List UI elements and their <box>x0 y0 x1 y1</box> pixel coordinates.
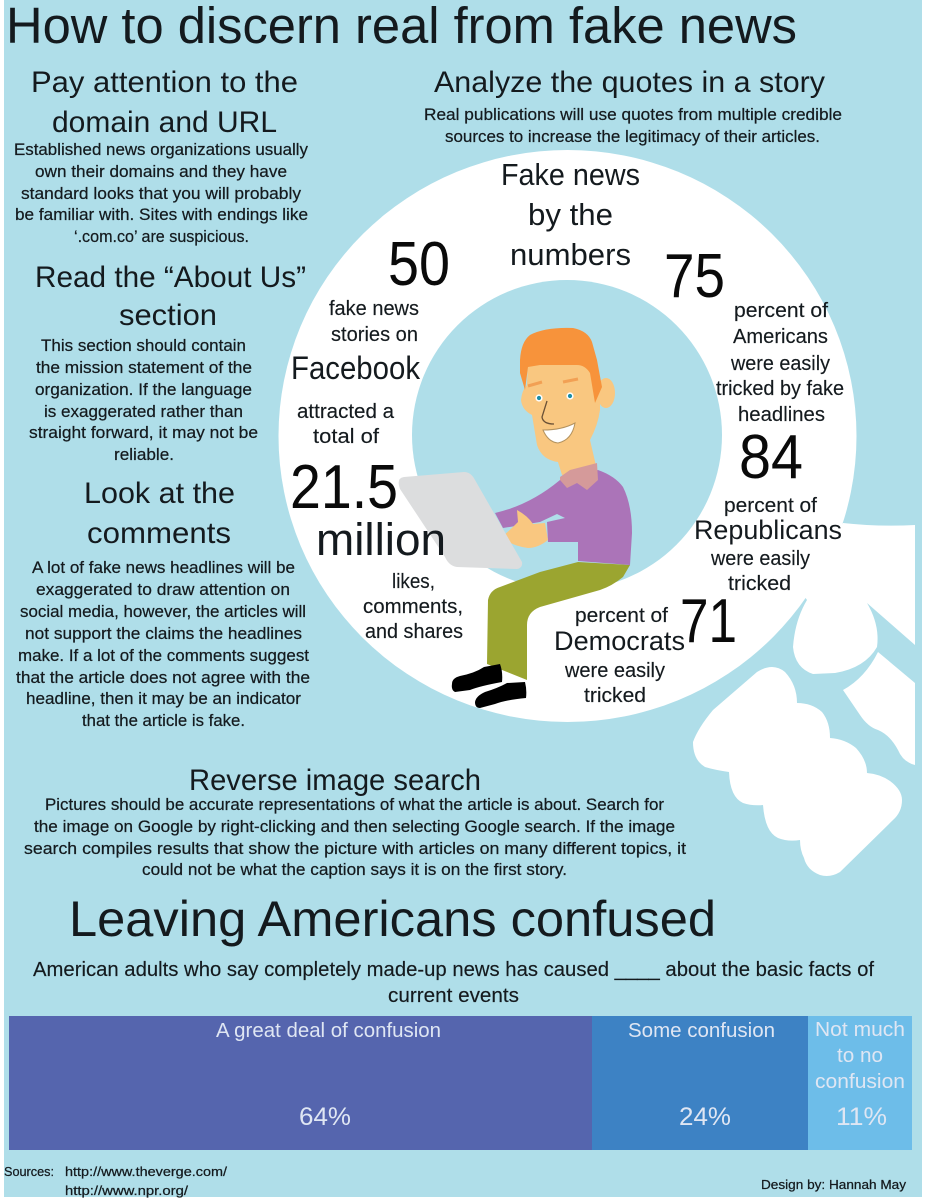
section: quotes: sources to increase the legitimacy of their articles. <box>445 128 820 146</box>
section: comments: headline, then it may be an indicator <box>26 690 302 708</box>
section: reverse image search: the image on Google by right-clicking and then selecting Google search. If the image <box>34 818 675 836</box>
chart subtitle: American adults who say completely made-up news has caused ____ about the basic facts of <box>33 959 874 981</box>
stat: 71 percent of Democrats: tricked <box>584 684 646 707</box>
ring heading: by the <box>528 197 613 232</box>
segment: a great deal of confusion <box>9 1016 592 1150</box>
section: about us: section <box>119 299 217 332</box>
section: about us: Read the “About Us” <box>35 261 306 294</box>
segment: not much to no confusion: confusion <box>815 1071 905 1093</box>
eyes <box>535 394 543 402</box>
stat: 71 percent of Democrats: 71 <box>680 587 737 656</box>
hand <box>502 510 548 548</box>
stat: 71 percent of Democrats: percent of <box>575 604 668 627</box>
segment: some confusion: 24% <box>679 1103 731 1131</box>
section: about us <box>29 261 306 464</box>
segment: some confusion: Some confusion <box>628 1020 775 1042</box>
stat: Facebook fake news: likes, <box>392 570 435 593</box>
stat: 75 percent of Americans: headlines <box>738 403 825 426</box>
section: domain and URL <box>14 66 309 246</box>
illustration: man reading a tablet <box>399 328 632 708</box>
stat: Facebook fake news: stories on <box>331 323 418 346</box>
stat: 75 percent of Americans <box>664 242 844 426</box>
stat: 75 percent of Americans: were easily <box>730 352 831 375</box>
section: reverse image search <box>24 764 686 879</box>
section: about us: This section should contain <box>41 337 246 355</box>
stat: 84 percent of Republicans: tricked <box>728 572 791 595</box>
ring: fake news by the numbers <box>278 150 856 722</box>
stat: Facebook fake news: and shares <box>365 620 463 643</box>
section: domain and URL: be familiar with. Sites with endings like <box>15 206 308 224</box>
section: domain and URL: domain and URL <box>52 106 277 139</box>
section: about us: straight forward, it may not be <box>29 424 258 442</box>
section: comments: exaggerated to draw attention on <box>36 581 290 599</box>
eyebrows <box>528 379 578 386</box>
section: reverse image search: could not be what the caption says it is on the first story. <box>142 861 567 879</box>
stat: Facebook fake news: total of <box>313 425 379 448</box>
sweater <box>495 470 632 565</box>
stat: Facebook fake news <box>290 230 463 643</box>
section: comments: comments <box>87 517 231 550</box>
sources: Sources: <box>4 1164 54 1179</box>
section: domain and URL: ‘.com.co’ are suspicious. <box>74 228 249 246</box>
stat: 84 percent of Republicans: were easily <box>710 547 811 570</box>
stat: Facebook fake news: attracted a <box>297 400 395 423</box>
segment: a great deal of confusion: 64% <box>299 1103 351 1131</box>
stat: 84 percent of Republicans: percent of <box>724 494 817 517</box>
segment: not much to no confusion: to no <box>837 1045 883 1067</box>
icon: thumbs up hand <box>693 523 915 876</box>
ring heading: numbers <box>510 237 631 272</box>
section: comments <box>16 477 310 730</box>
stat: 71 percent of Democrats: Democrats <box>554 626 685 656</box>
shoes <box>452 664 526 708</box>
section: domain and URL: Pay attention to the <box>31 66 298 99</box>
ear <box>597 378 615 408</box>
stat: 75 percent of Americans: tricked by fake <box>716 377 844 400</box>
segment: not much to no confusion: Not much <box>815 1019 905 1041</box>
stat: 84 percent of Republicans <box>694 423 842 595</box>
stat: 75 percent of Americans: percent of <box>734 299 828 322</box>
legs <box>487 562 630 680</box>
section: comments: that the article does not agree with the <box>16 669 310 687</box>
section: comments: make. If a lot of the comments suggest <box>18 647 309 665</box>
section: reverse image search: Pictures should be accurate representations of what the article is about. Search for <box>45 796 665 814</box>
section: comments: A lot of fake news headlines will be <box>32 559 295 577</box>
stat: Facebook fake news: comments, <box>363 595 463 618</box>
heading: leaving Americans confused: Leaving Americans confused <box>69 891 716 947</box>
sources: http://www.npr.org/ <box>65 1183 188 1198</box>
section: domain and URL: standard looks that you will probably <box>21 185 302 203</box>
section: quotes: Real publications will use quotes from multiple credible <box>424 106 842 124</box>
section: quotes <box>424 66 842 146</box>
credit: Design by: Hannah May <box>761 1177 907 1192</box>
nose <box>542 401 554 424</box>
stat: Facebook fake news: 50 <box>388 230 450 299</box>
section: about us: is exaggerated rather than <box>44 403 243 421</box>
section: quotes: Analyze the quotes in a story <box>434 66 825 99</box>
stat: 75 percent of Americans: 75 <box>664 242 725 311</box>
sources <box>4 1164 227 1198</box>
chart subtitle <box>33 959 874 1007</box>
stat: Facebook fake news: 21.5 <box>290 453 398 522</box>
section: domain and URL: Established news organizations usually <box>14 141 309 159</box>
ring heading: Fake news <box>501 157 640 192</box>
chart subtitle: current events <box>388 985 519 1007</box>
segment: not much to no confusion <box>808 1016 912 1150</box>
section: about us: reliable. <box>114 446 174 464</box>
ring heading <box>501 157 640 272</box>
stat: Facebook fake news: Facebook <box>291 350 421 386</box>
section: about us: organization. If the language <box>35 381 252 399</box>
section: comments: Look at the <box>84 477 235 510</box>
section: about us: the mission statement of the <box>36 359 252 377</box>
collar <box>560 463 598 490</box>
segment: some confusion <box>592 1016 808 1150</box>
section: comments: not support the claims the headlines <box>25 625 302 643</box>
section: reverse image search: search compiles results that show the picture with articles on many different topics, it <box>24 840 686 858</box>
stat: 71 percent of Democrats <box>554 587 737 707</box>
tablet <box>399 472 522 569</box>
neck and face <box>521 360 600 475</box>
stat: Facebook fake news: million <box>316 514 446 565</box>
stat: Facebook fake news: fake news <box>329 297 419 320</box>
stat: 71 percent of Democrats: were easily <box>564 659 666 682</box>
section: reverse image search: Reverse image search <box>189 764 481 797</box>
stat: 84 percent of Republicans: 84 <box>739 423 803 492</box>
smile <box>543 423 575 443</box>
segment: a great deal of confusion: A great deal of confusion <box>216 1020 441 1042</box>
segment: not much to no confusion: 11% <box>836 1103 887 1131</box>
stat: 75 percent of Americans: Americans <box>733 325 828 348</box>
hair <box>520 328 602 403</box>
section: comments: social media, however, the articles will <box>20 603 306 621</box>
section: domain and URL: own their domains and they have <box>35 163 287 181</box>
stat: 84 percent of Republicans: Republicans <box>694 515 842 545</box>
stacked bar chart <box>9 1016 912 1150</box>
section: comments: that the article is fake. <box>82 712 245 730</box>
sources: http://www.theverge.com/ <box>65 1164 227 1179</box>
